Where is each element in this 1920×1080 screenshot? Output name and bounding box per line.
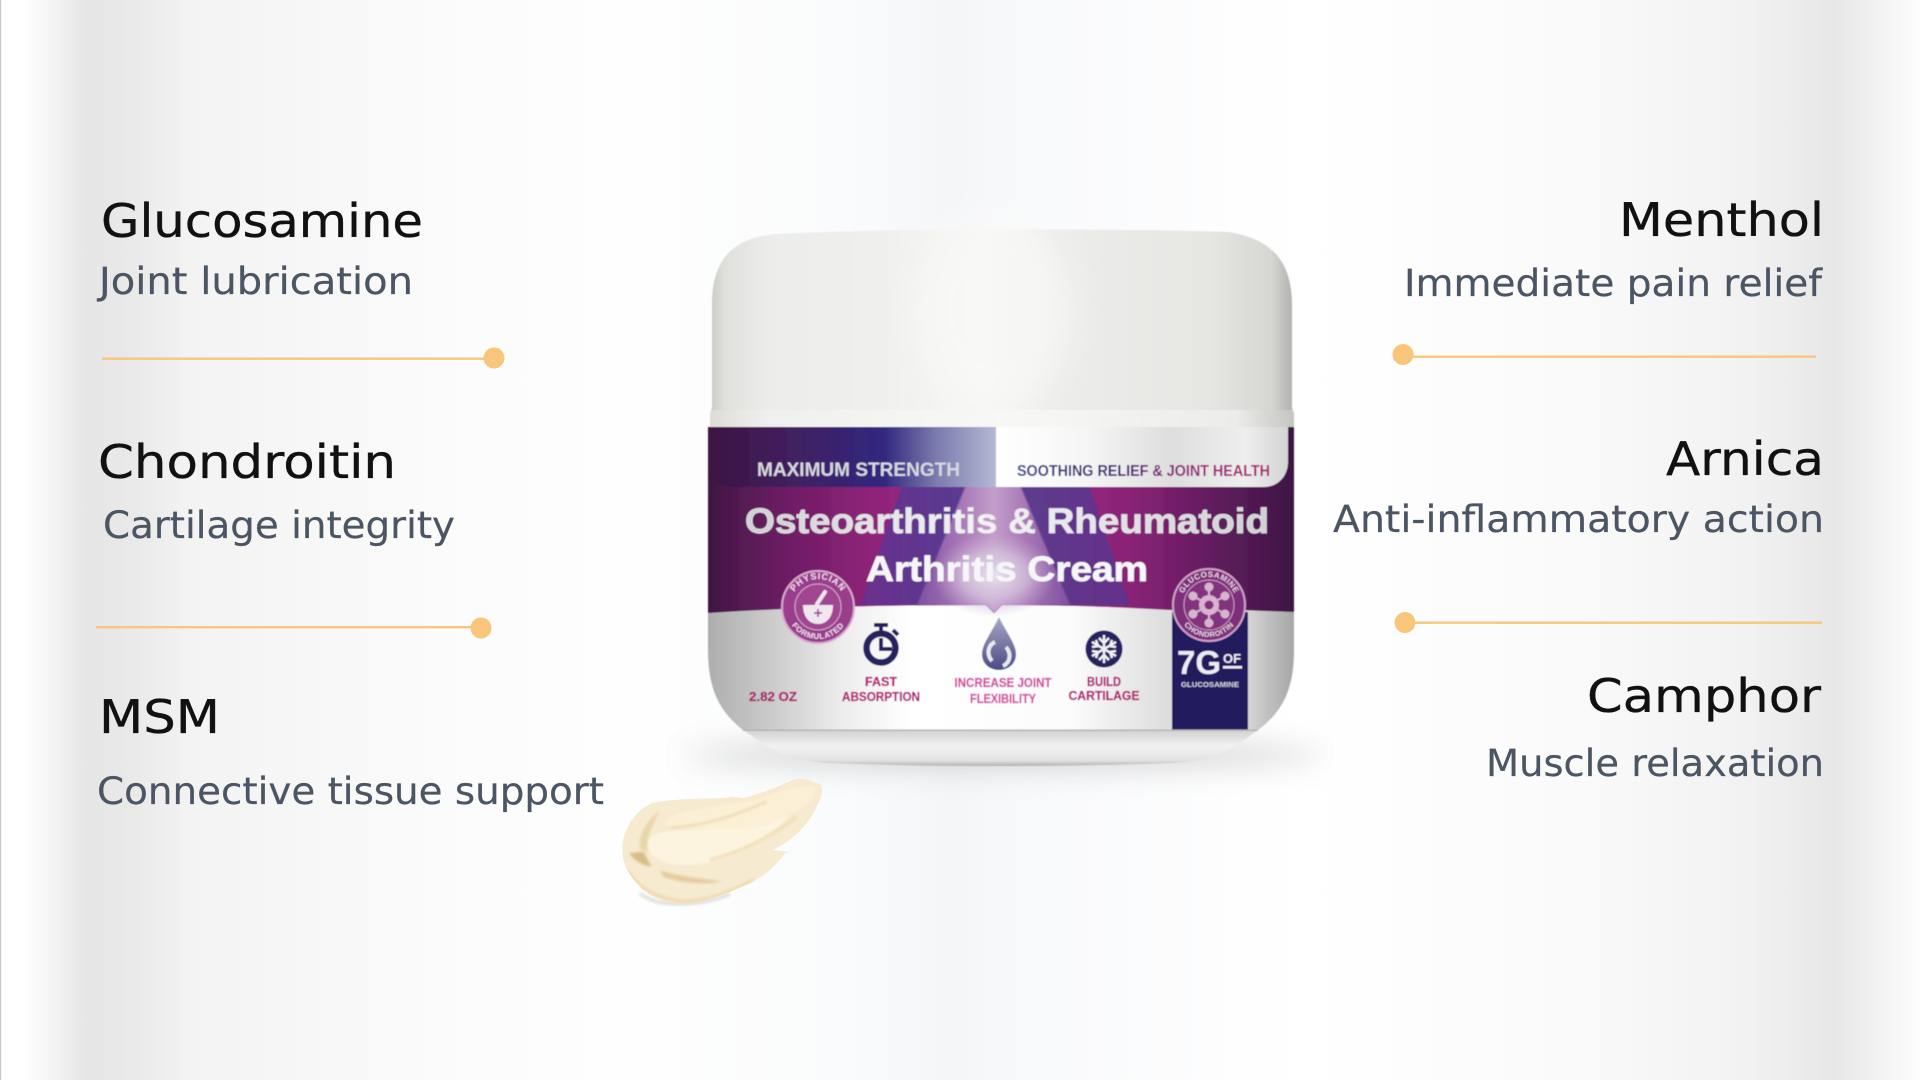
navy panel xyxy=(1172,612,1248,732)
feature: build cartilage: BUILD xyxy=(1087,675,1121,689)
cream bowl highlight xyxy=(648,818,786,865)
net weight: 2.82 OZ xyxy=(749,689,797,704)
label text: soothing relief: SOOTHING RELIEF & JOINT HEALTH xyxy=(1017,463,1270,480)
right ingredients column xyxy=(1333,193,1824,785)
badge: glucosamine chondroitin xyxy=(1171,567,1247,643)
label text: maximum strength: MAXIMUM STRENGTH xyxy=(757,460,960,481)
feature: increase joint flexibility: INCREASE JOINT xyxy=(954,676,1052,690)
tab: maximum strength xyxy=(700,427,996,487)
ingredient: Arnica: Arnica xyxy=(1666,432,1824,486)
7G of glucosamine: 7G xyxy=(1177,644,1221,681)
jar shadow xyxy=(685,741,1325,769)
ingredient: Camphor: Muscle relaxation xyxy=(1486,742,1824,785)
7G of glucosamine xyxy=(1177,644,1242,689)
connector line with dot: Menthol xyxy=(1392,344,1816,365)
label title: Arthritis Cream xyxy=(866,550,1148,589)
7G of glucosamine: OF xyxy=(1223,651,1241,666)
ingredient: Menthol: Menthol xyxy=(1619,193,1824,247)
label title: Osteoarthritis & Rheumatoid xyxy=(745,502,1269,541)
cream swatch xyxy=(622,778,822,906)
ingredient: Menthol xyxy=(1404,193,1824,305)
ingredient: Chondroitin xyxy=(98,435,455,547)
icon: stopwatch xyxy=(866,623,898,662)
left ingredients column xyxy=(96,194,604,813)
badge: glucosamine chondroitin: CHONDROITIN xyxy=(1184,622,1234,638)
badge: physician formulated: PHYSICIAN xyxy=(789,572,846,592)
icon: snowflake xyxy=(1086,630,1122,668)
jar lid xyxy=(710,229,1294,428)
ingredient: Arnica xyxy=(1333,432,1824,541)
feature: fast absorption: ABSORPTION xyxy=(842,690,920,704)
ingredient: Chondroitin: Cartilage integrity xyxy=(103,504,455,547)
feature: increase joint flexibility: FLEXIBILITY xyxy=(970,692,1037,706)
ingredient: Arnica: Anti-inflammatory action xyxy=(1333,498,1824,541)
feature: fast absorption: FAST xyxy=(865,675,897,689)
ingredient: Glucosamine: Glucosamine xyxy=(101,194,423,248)
feature: build cartilage xyxy=(1068,675,1140,703)
connector line with dot: Glucosamine xyxy=(102,348,504,368)
icon: water drop with arrows xyxy=(982,617,1016,670)
jar bottom lip xyxy=(743,730,1258,766)
feature: increase joint flexibility xyxy=(954,676,1052,706)
purple band xyxy=(708,427,1294,613)
product jar xyxy=(707,230,1295,766)
ingredient: MSM: MSM xyxy=(99,690,220,744)
badge: physician formulated: FORMULATED xyxy=(791,622,844,640)
feature: build cartilage: CARTILAGE xyxy=(1068,689,1140,703)
badge: physician formulated xyxy=(780,569,856,644)
connector line with dot: Arnica xyxy=(1394,612,1822,633)
7G of glucosamine: GLUCOSAMINE xyxy=(1181,680,1239,689)
ingredient: MSM xyxy=(97,690,604,813)
ingredient: Glucosamine xyxy=(97,194,423,303)
ingredient: Camphor xyxy=(1486,669,1824,785)
feature: fast absorption xyxy=(842,675,920,704)
ingredient: Glucosamine: Joint lubrication xyxy=(97,260,413,303)
ingredient: MSM: Connective tissue support xyxy=(97,770,604,813)
label title xyxy=(745,502,1269,589)
ingredient: Menthol: Immediate pain relief xyxy=(1404,262,1823,305)
connector line with dot: Chondroitin xyxy=(96,618,492,638)
tab: soothing relief xyxy=(996,427,1288,487)
badge: glucosamine chondroitin: GLUCOSAMINE xyxy=(1178,570,1240,594)
ingredient: Chondroitin: Chondroitin xyxy=(98,435,396,489)
jar label body xyxy=(700,427,1294,737)
centre light rays xyxy=(860,480,1130,613)
ingredient: Camphor: Camphor xyxy=(1587,669,1821,723)
